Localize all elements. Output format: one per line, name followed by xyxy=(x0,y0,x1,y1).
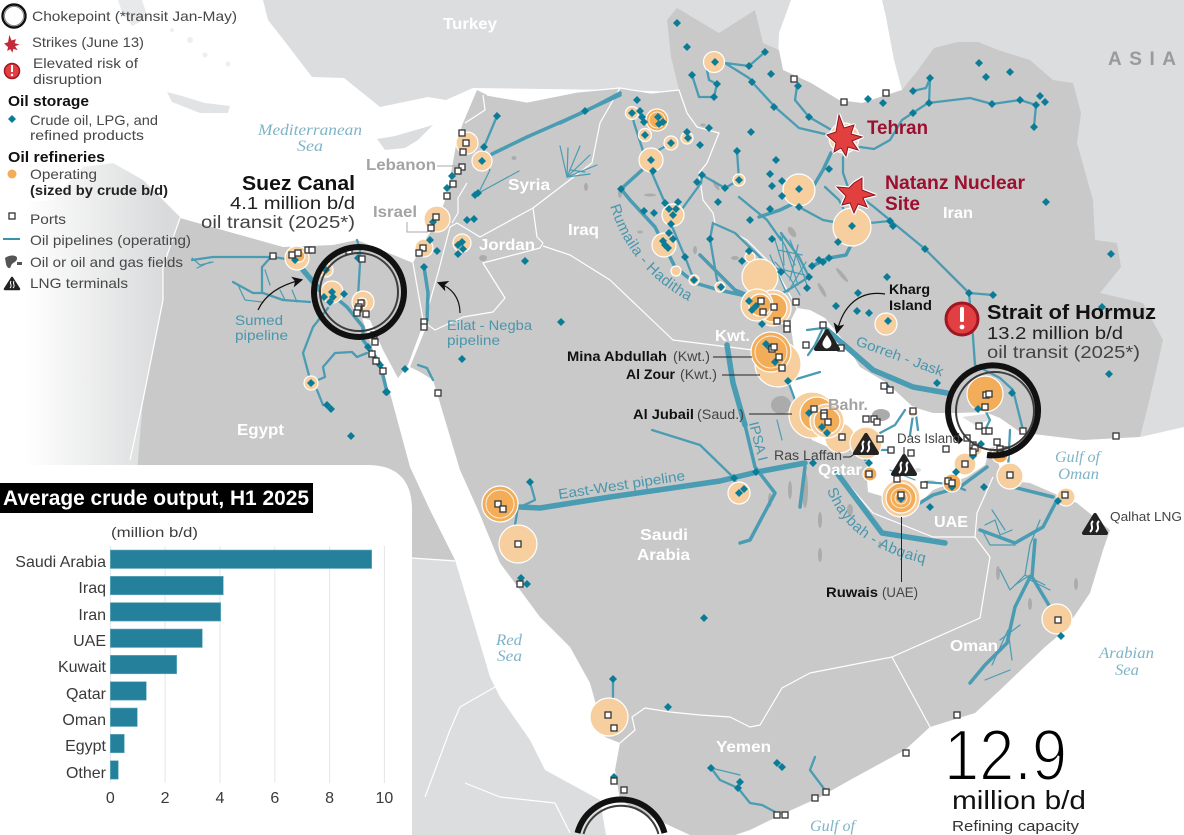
label: Natanz Nuclear Site: Natanz Nuclear xyxy=(885,173,1026,194)
thin feeder lines xyxy=(192,146,1050,775)
legend: chokepoint xyxy=(2,4,237,28)
land: Caspian Sea xyxy=(778,0,902,103)
strike marker: Natanz xyxy=(837,178,875,213)
country borders xyxy=(130,88,993,833)
chart unit: (million b/d) xyxy=(111,524,198,540)
country labels: Qatar xyxy=(818,462,862,479)
gulf islands xyxy=(915,414,990,484)
legend: elevated risk: Elevated risk of xyxy=(33,55,138,71)
callout: Strait of Hormuz: oil transit (2025*) xyxy=(987,342,1140,362)
label: Das Island xyxy=(897,431,960,455)
pipeline labels: East-West pipeline xyxy=(557,467,686,502)
bar chart: 0 xyxy=(106,790,115,807)
oil and gas fields xyxy=(479,124,1078,610)
callout: Suez Canal: oil transit (2025*) xyxy=(201,212,355,232)
label: Mina Abdullah: (Kwt.) xyxy=(673,349,710,364)
legend: elevated risk xyxy=(4,55,138,87)
chart heading: Average crude output, H1 2025 xyxy=(3,487,309,510)
leaders: Lebanon and Israel xyxy=(407,166,458,232)
country labels: UAE xyxy=(934,514,968,531)
bar chart: Kuwait xyxy=(58,659,107,676)
label: Qalhat LNG: Qalhat LNG xyxy=(1110,509,1182,524)
label: Al Zour: (Kwt.) xyxy=(680,367,717,382)
callout: Strait of Hormuz xyxy=(987,302,1156,362)
thick trunk pipelines xyxy=(303,270,947,543)
legend: oil storage: Crude oil, LPG, and xyxy=(30,112,158,128)
legend: strikes xyxy=(4,34,144,53)
sea labels: Mediterranean xyxy=(257,122,362,139)
label: Al Zour: Al Zour xyxy=(626,367,676,382)
sea labels: Oman xyxy=(1058,466,1099,483)
chokepoint: Strait of Hormuz ring xyxy=(948,365,1038,455)
sea labels: Red xyxy=(495,632,523,649)
oil storage diamonds xyxy=(291,19,1115,792)
land: Egypt xyxy=(130,218,455,560)
legend: oil fields: Oil or oil and gas fields xyxy=(30,254,183,270)
chokepoint: Bab el-Mandeb ring xyxy=(578,800,664,834)
arrow: Sumed pipeline xyxy=(258,280,301,310)
pipeline labels: pipeline xyxy=(235,327,288,343)
label: Ras Laffan: Ras Laffan xyxy=(774,448,842,463)
strike marker: Tehran xyxy=(827,115,862,156)
country labels: Yemen xyxy=(716,739,771,756)
grey labels: Lebanon, Israel, Bahrain, Asia: ASIA xyxy=(1108,49,1176,70)
legend: elevated risk: disruption xyxy=(33,71,102,87)
country labels: Oman xyxy=(950,638,998,655)
bar chart: 2 xyxy=(161,790,170,807)
label: Mina Abdullah: Mina Abdullah xyxy=(567,349,667,364)
grey labels: Lebanon, Israel, Bahrain, Asia: Bahr. xyxy=(828,397,868,414)
label: Ruwais: Ruwais xyxy=(826,585,878,600)
legend: oil storage: Oil storage xyxy=(8,93,89,110)
legend: LNG terminals: LNG terminals xyxy=(30,275,128,291)
pipeline labels: Rumaila - Haditha xyxy=(610,204,691,301)
bar chart: Other xyxy=(66,765,107,782)
stat: refining capacity: Refining capacity xyxy=(952,818,1080,835)
country labels: Egypt xyxy=(237,422,284,439)
legend: oil refineries: (sized by crude b/d) xyxy=(30,182,168,198)
sea labels: Gulf of xyxy=(1055,449,1103,466)
oil refineries xyxy=(285,52,1075,736)
label: Kharg Island xyxy=(889,281,932,313)
sea labels: Sea xyxy=(297,138,323,155)
sea labels: Arabian xyxy=(1098,645,1154,662)
legend: oil refineries: Oil refineries xyxy=(8,149,105,166)
country labels: Arabia xyxy=(637,547,690,564)
country labels: Syria xyxy=(508,177,550,194)
legend: oil refineries: Operating xyxy=(30,166,97,182)
callout: Strait of Hormuz: 13.2 million b/d xyxy=(987,323,1123,343)
bar chart: 8 xyxy=(325,790,334,807)
callout: Suez Canal xyxy=(201,173,355,232)
pipeline labels: Sumed xyxy=(235,312,283,328)
pipeline labels xyxy=(235,204,947,566)
label: Al Jubail xyxy=(633,407,792,422)
callout: Suez Canal: 4.1 million b/d xyxy=(230,193,355,213)
grey labels: Lebanon, Israel, Bahrain, Asia xyxy=(366,49,1176,414)
land: Middle East focus countries xyxy=(410,8,1163,835)
grey labels: Lebanon, Israel, Bahrain, Asia: Israel xyxy=(373,204,417,221)
pipeline labels: Eilat - Negba xyxy=(447,317,532,333)
elevated risk icon: Hormuz xyxy=(946,303,978,335)
panel: crude output chart xyxy=(0,465,412,835)
country labels: Jordan xyxy=(479,237,535,254)
bar chart: Iran xyxy=(78,607,106,624)
pipeline labels: IPSA I xyxy=(746,420,771,463)
stat: refining capacity xyxy=(944,716,1086,835)
LNG terminal: Kharg xyxy=(816,331,838,349)
country labels: Iraq xyxy=(568,222,599,239)
arrow: Kharg Island xyxy=(837,293,885,332)
country labels: Turkey xyxy=(443,16,497,33)
bar chart: Qatar xyxy=(66,686,107,703)
country labels: Saudi xyxy=(640,527,688,544)
sea labels: Sea xyxy=(1115,662,1139,679)
oil pipelines xyxy=(192,52,1057,813)
bar chart: 10 xyxy=(376,790,393,807)
bar chart: UAE xyxy=(73,633,106,650)
label: Ruwais: (UAE) xyxy=(882,585,918,600)
LNG terminal: Ras Laffan xyxy=(855,435,877,453)
label: Kharg Island: Island xyxy=(889,297,932,313)
legend xyxy=(2,4,237,291)
bar chart: Iraq xyxy=(78,580,106,597)
country labels: Iran xyxy=(943,205,973,222)
arrow: Eilat-Negba pipeline xyxy=(439,283,460,313)
chokepoint: Suez Canal ring xyxy=(314,247,404,337)
legend: oil refineries xyxy=(8,149,168,198)
label: Kharg Island: Kharg xyxy=(889,281,930,297)
label: Ruwais xyxy=(826,517,918,600)
label: Tehran: Tehran xyxy=(867,118,928,139)
bar chart: 6 xyxy=(270,790,279,807)
label: Al Zour xyxy=(626,367,760,382)
legend: oil pipelines: Oil pipelines (operating) xyxy=(30,232,191,248)
label: Al Jubail: Al Jubail xyxy=(633,407,694,422)
label: Natanz Nuclear Site: Site xyxy=(885,194,920,215)
legend: oil storage xyxy=(8,93,158,143)
bar chart xyxy=(15,546,393,807)
bar chart: Oman xyxy=(62,712,106,729)
callout: Suez Canal: Suez Canal xyxy=(242,173,355,195)
callout: Strait of Hormuz: Strait of Hormuz xyxy=(987,302,1156,324)
regional pipelines xyxy=(192,52,1036,813)
bar chart: Egypt xyxy=(65,738,107,755)
legend: chokepoint: Chokepoint (*transit Jan-May) xyxy=(32,8,237,24)
label: Al Jubail: (Saud.) xyxy=(697,407,744,422)
country labels xyxy=(237,16,998,756)
stat: refining capacity: 12.9 xyxy=(944,716,1067,796)
country labels: Kwt. xyxy=(715,328,750,345)
pipeline labels: pipeline xyxy=(447,332,500,348)
sea labels: Gulf of xyxy=(810,818,858,835)
stat: refining capacity: million b/d xyxy=(952,785,1086,815)
legend: strikes: Strikes (June 13) xyxy=(32,34,144,50)
LNG terminal: Qalhat xyxy=(1084,515,1106,533)
bar chart: Saudi Arabia xyxy=(15,554,106,571)
bar chart: 4 xyxy=(216,790,225,807)
sea labels xyxy=(257,122,1154,835)
grey labels: Lebanon, Israel, Bahrain, Asia: Lebanon xyxy=(366,157,436,174)
legend: oil storage: refined products xyxy=(30,127,144,143)
label: Natanz Nuclear Site xyxy=(885,173,1026,215)
sea labels: Sea xyxy=(497,648,522,665)
pipeline labels: Shaybah - Abqaiq xyxy=(828,488,926,566)
legend: ports: Ports xyxy=(30,211,66,227)
pipeline labels: Gorreh - Jask xyxy=(854,333,947,380)
label: Mina Abdullah xyxy=(567,349,752,364)
LNG terminal: Das Island xyxy=(893,456,915,474)
label: Das Island: Das Island xyxy=(897,431,960,446)
legend: ports xyxy=(9,211,66,227)
ports xyxy=(270,76,1119,818)
